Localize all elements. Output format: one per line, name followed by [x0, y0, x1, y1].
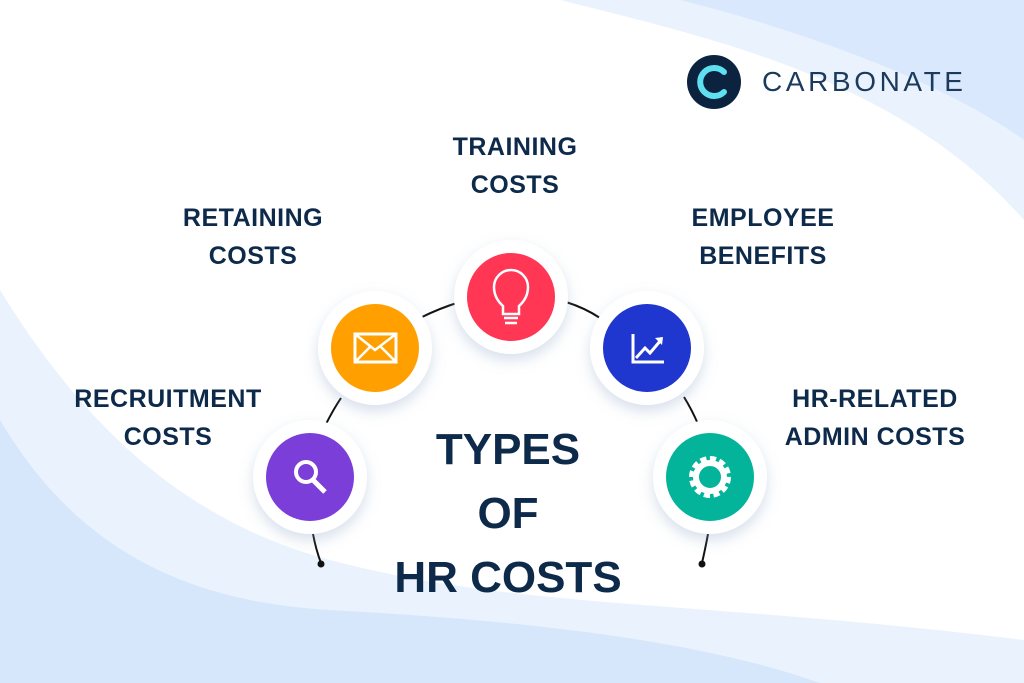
label: retaining: RETAINING [183, 204, 323, 232]
icon: retaining envelope [318, 291, 432, 405]
label: training: COSTS [471, 171, 559, 199]
title: HR COSTS [394, 553, 622, 602]
icon: admin gear [653, 420, 767, 534]
title: TYPES [436, 425, 580, 474]
logo [687, 55, 967, 109]
label: admin [785, 385, 965, 451]
label: recruitment: COSTS [124, 423, 212, 451]
label: retaining [183, 204, 323, 270]
label: employee benefits: EMPLOYEE [692, 204, 834, 232]
label: admin: HR-RELATED [792, 385, 958, 413]
label: employee benefits [692, 204, 834, 270]
label: recruitment: RECRUITMENT [74, 385, 262, 413]
title [394, 425, 622, 602]
label: training: TRAINING [453, 133, 577, 161]
icon: logo C [687, 55, 741, 109]
label: employee benefits: BENEFITS [699, 242, 827, 270]
title: OF [477, 489, 539, 538]
label: retaining: COSTS [209, 242, 297, 270]
icon: benefits chart [590, 291, 704, 405]
icon: training bulb [454, 240, 568, 354]
icon: recruitment magnifier [253, 420, 367, 534]
logo text: CARBONATE [762, 66, 967, 97]
label: training [452, 133, 577, 199]
label: admin: ADMIN COSTS [785, 423, 965, 451]
label: recruitment [74, 385, 262, 451]
